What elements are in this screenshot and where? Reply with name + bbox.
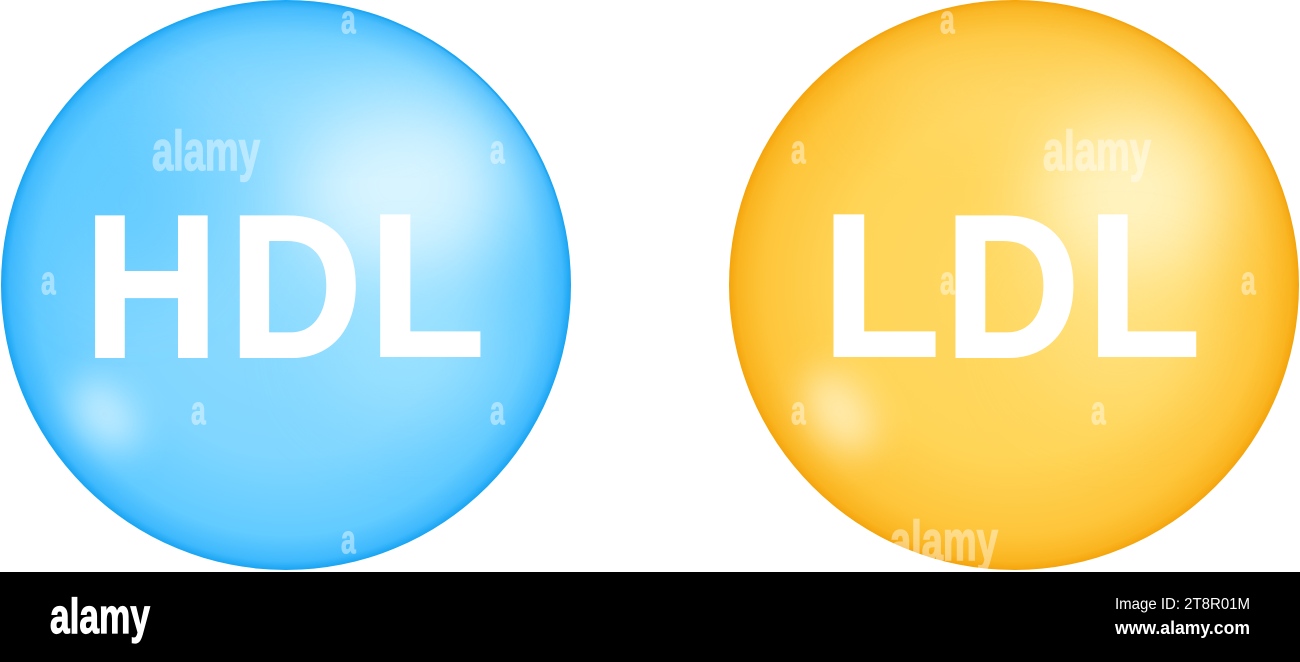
watermark: alamy logos: alamy xyxy=(152,121,260,183)
watermark: small a marks: a xyxy=(490,128,506,172)
label: LDL: L xyxy=(822,172,940,399)
label: LDL: D xyxy=(944,174,1080,400)
image id: Image ID: 2T8R01M xyxy=(1115,596,1250,613)
watermark: small a marks xyxy=(41,0,1257,562)
watermark: small a marks: a xyxy=(41,259,57,303)
watermark: small a marks: a xyxy=(341,518,357,562)
watermark: small a marks: a xyxy=(1091,389,1107,433)
website: www.alamy.com xyxy=(1114,618,1250,638)
watermark: alamy logos xyxy=(152,121,1151,573)
footer bar xyxy=(0,572,1300,662)
watermark: small a marks: a xyxy=(490,389,506,433)
label: HDL: D xyxy=(229,173,362,400)
watermark: small a marks: a xyxy=(791,128,807,172)
orange LDL sphere xyxy=(729,0,1299,570)
label: LDL: L xyxy=(1087,173,1201,399)
blue HDL sphere xyxy=(1,0,571,570)
label: LDL xyxy=(822,172,1201,400)
watermark: small a marks: a xyxy=(791,389,807,433)
watermark: alamy logos: alamy xyxy=(890,511,998,573)
label: HDL xyxy=(84,172,485,400)
watermark: small a marks: a xyxy=(940,259,956,303)
label: HDL: H xyxy=(84,173,219,400)
watermark: alamy logos: alamy xyxy=(1043,121,1151,183)
footer logo: alamy: alamy xyxy=(50,589,150,644)
watermark: small a marks: a xyxy=(1241,259,1257,303)
label: HDL: L xyxy=(369,172,485,399)
watermark: small a marks: a xyxy=(191,389,207,433)
